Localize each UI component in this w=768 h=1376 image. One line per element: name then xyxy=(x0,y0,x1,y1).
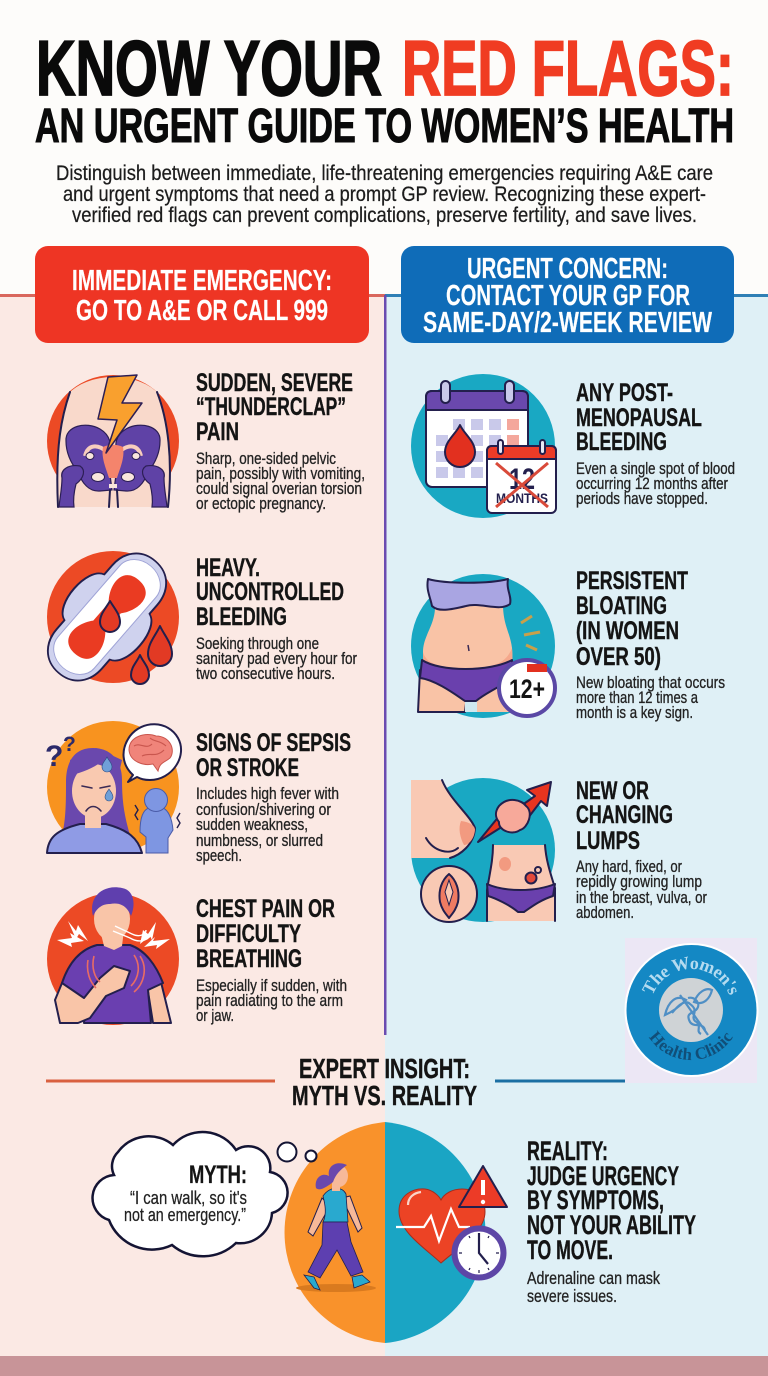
text: reality: severe issues. xyxy=(527,1286,617,1306)
logo: The Women's Health Clinic: Health Clinic xyxy=(648,1030,733,1060)
text: sepsis or stroke: confusion/shivering or xyxy=(196,801,331,819)
text: post-menopausal bleeding: Even a single spot of blood xyxy=(576,460,735,478)
intro text: verified red flags can prevent complications, preserve fertility, and save lives. xyxy=(72,204,697,227)
text: persistent bloating: OVER 50) xyxy=(576,643,661,671)
text: sudden severe pain: Sharp, one-sided pelvic xyxy=(196,450,336,468)
text: sepsis or stroke: sudden weakness, xyxy=(196,816,308,834)
icon: sepsis or stroke xyxy=(45,721,181,853)
text: post-menopausal bleeding xyxy=(576,379,735,508)
text: heavy bleeding: sanitary pad every hour for xyxy=(196,650,357,668)
text: post-menopausal bleeding: occurring 12 months after xyxy=(576,475,728,493)
text: chest pain: pain radiating to the arm xyxy=(196,992,343,1010)
text: reality: Adrenaline can mask xyxy=(527,1268,660,1288)
text: heavy bleeding: two consecutive hours. xyxy=(196,665,335,683)
icon: sepsis or stroke: ? xyxy=(45,740,63,773)
callout: myth thought bubble: “I can walk, so it's xyxy=(130,1188,247,1208)
text: heavy bleeding: UNCONTROLLED xyxy=(196,578,344,606)
icon: chest pain xyxy=(47,887,179,1025)
text: sepsis or stroke: OR STROKE xyxy=(196,754,299,782)
text: new or changing lumps: repidly growing lump xyxy=(576,873,702,891)
text: chest pain: DIFFICULTY xyxy=(196,920,301,948)
text: chest pain: or jaw. xyxy=(196,1007,234,1025)
callout: myth thought bubble: MYTH: xyxy=(189,1161,247,1189)
text: new or changing lumps: NEW OR xyxy=(576,777,649,805)
text: sepsis or stroke: speech. xyxy=(196,847,242,865)
icon: lumps xyxy=(411,778,555,922)
myth vs reality circle xyxy=(285,1122,485,1343)
text: sudden severe pain xyxy=(196,369,365,513)
text: sudden severe pain: “THUNDERCLAP” xyxy=(196,393,346,421)
text: post-menopausal bleeding: MENOPAUSAL xyxy=(576,404,702,432)
text: post-menopausal bleeding: periods have stopped. xyxy=(576,490,708,508)
text: persistent bloating: month is a key sign. xyxy=(576,704,693,722)
text: sudden severe pain: or ectopic pregnancy. xyxy=(196,495,326,513)
footer band xyxy=(0,1356,768,1376)
panel header: immediate emergency xyxy=(35,246,369,343)
heading: expert insight xyxy=(46,1053,625,1111)
title xyxy=(35,24,734,153)
icon: pelvic pain xyxy=(47,375,179,507)
icon: heart, warning and clock xyxy=(396,1166,507,1278)
text: chest pain: BREATHING xyxy=(196,945,302,973)
heading: expert insight: MYTH VS. REALITY xyxy=(292,1080,477,1111)
intro text xyxy=(56,162,713,227)
text: new or changing lumps: abdomen. xyxy=(576,904,634,922)
text: persistent bloating xyxy=(576,567,725,722)
text: reality: TO MOVE. xyxy=(527,1235,613,1265)
callout: myth thought bubble: not an emergency.” xyxy=(124,1205,246,1225)
logo: The Women's Health Clinic: The Women's xyxy=(642,956,737,995)
text: heavy bleeding: BLEEDING xyxy=(196,603,287,631)
icon: calendar and blood drop: MONTHS xyxy=(496,490,548,506)
text: new or changing lumps: CHANGING xyxy=(576,801,673,829)
text: reality: BY SYMPTOMS, xyxy=(527,1185,664,1215)
text: new or changing lumps xyxy=(576,777,707,922)
text: sudden severe pain: pain, possibly with vomiting, xyxy=(196,465,365,483)
text: post-menopausal bleeding: BLEEDING xyxy=(576,428,667,456)
text: reality: JUDGE URGENCY xyxy=(527,1161,679,1191)
text: persistent bloating: PERSISTENT xyxy=(576,567,688,595)
text: chest pain xyxy=(196,895,347,1025)
text: persistent bloating: BLOATING xyxy=(576,592,667,620)
text: sepsis or stroke: SIGNS OF SEPSIS xyxy=(196,729,351,757)
text: persistent bloating: more than 12 times a xyxy=(576,689,699,707)
text: sudden severe pain: PAIN xyxy=(196,418,239,446)
text: sudden severe pain: SUDDEN, SEVERE xyxy=(196,369,353,397)
text: chest pain: CHEST PAIN OR xyxy=(196,895,335,923)
text: sepsis or stroke: numbness, or slurred xyxy=(196,832,323,850)
panel header: immediate emergency: IMMEDIATE EMERGENCY: xyxy=(72,265,332,297)
text: new or changing lumps: Any hard, fixed, or xyxy=(576,858,682,876)
icon: calendar and blood drop: 12 xyxy=(509,463,535,496)
text: persistent bloating: New bloating that occurs xyxy=(576,674,725,692)
title: KNOW YOUR xyxy=(36,24,382,112)
icon: bloating: 12+ xyxy=(509,674,545,704)
text: new or changing lumps: in the breast, vulva, or xyxy=(576,889,707,907)
icon: walking woman xyxy=(296,1163,376,1292)
text: new or changing lumps: LUMPS xyxy=(576,827,640,855)
panel header: immediate emergency: GO TO A&E OR CALL 999 xyxy=(76,295,328,327)
panel header: urgent concern xyxy=(401,246,734,343)
text: persistent bloating: (IN WOMEN xyxy=(576,617,679,645)
text: sudden severe pain: could signal overian torsion xyxy=(196,480,362,498)
heading: expert insight: EXPERT INSIGHT: xyxy=(299,1053,470,1084)
text: post-menopausal bleeding: ANY POST- xyxy=(576,379,673,407)
icon: calendar and blood drop xyxy=(411,374,556,518)
logo: The Women's Health Clinic xyxy=(624,938,758,1083)
text: heavy bleeding: Soeking through one xyxy=(196,635,319,653)
text: sepsis or stroke xyxy=(196,729,351,865)
icon: bloating xyxy=(411,574,555,718)
text: heavy bleeding xyxy=(196,554,357,683)
text: sepsis or stroke: Includes high fever with xyxy=(196,785,339,803)
text: chest pain: Especially if sudden, with xyxy=(196,977,347,995)
icon: sanitary pad with blood drops xyxy=(26,533,188,701)
panel header: urgent concern: URGENT CONCERN: xyxy=(467,253,668,285)
icon: sepsis or stroke: ? xyxy=(63,733,76,756)
text: reality: REALITY: xyxy=(527,1136,608,1166)
text: heavy bleeding: HEAVY. xyxy=(196,554,260,582)
text: reality xyxy=(527,1136,696,1306)
callout: myth thought bubble xyxy=(93,1132,316,1256)
